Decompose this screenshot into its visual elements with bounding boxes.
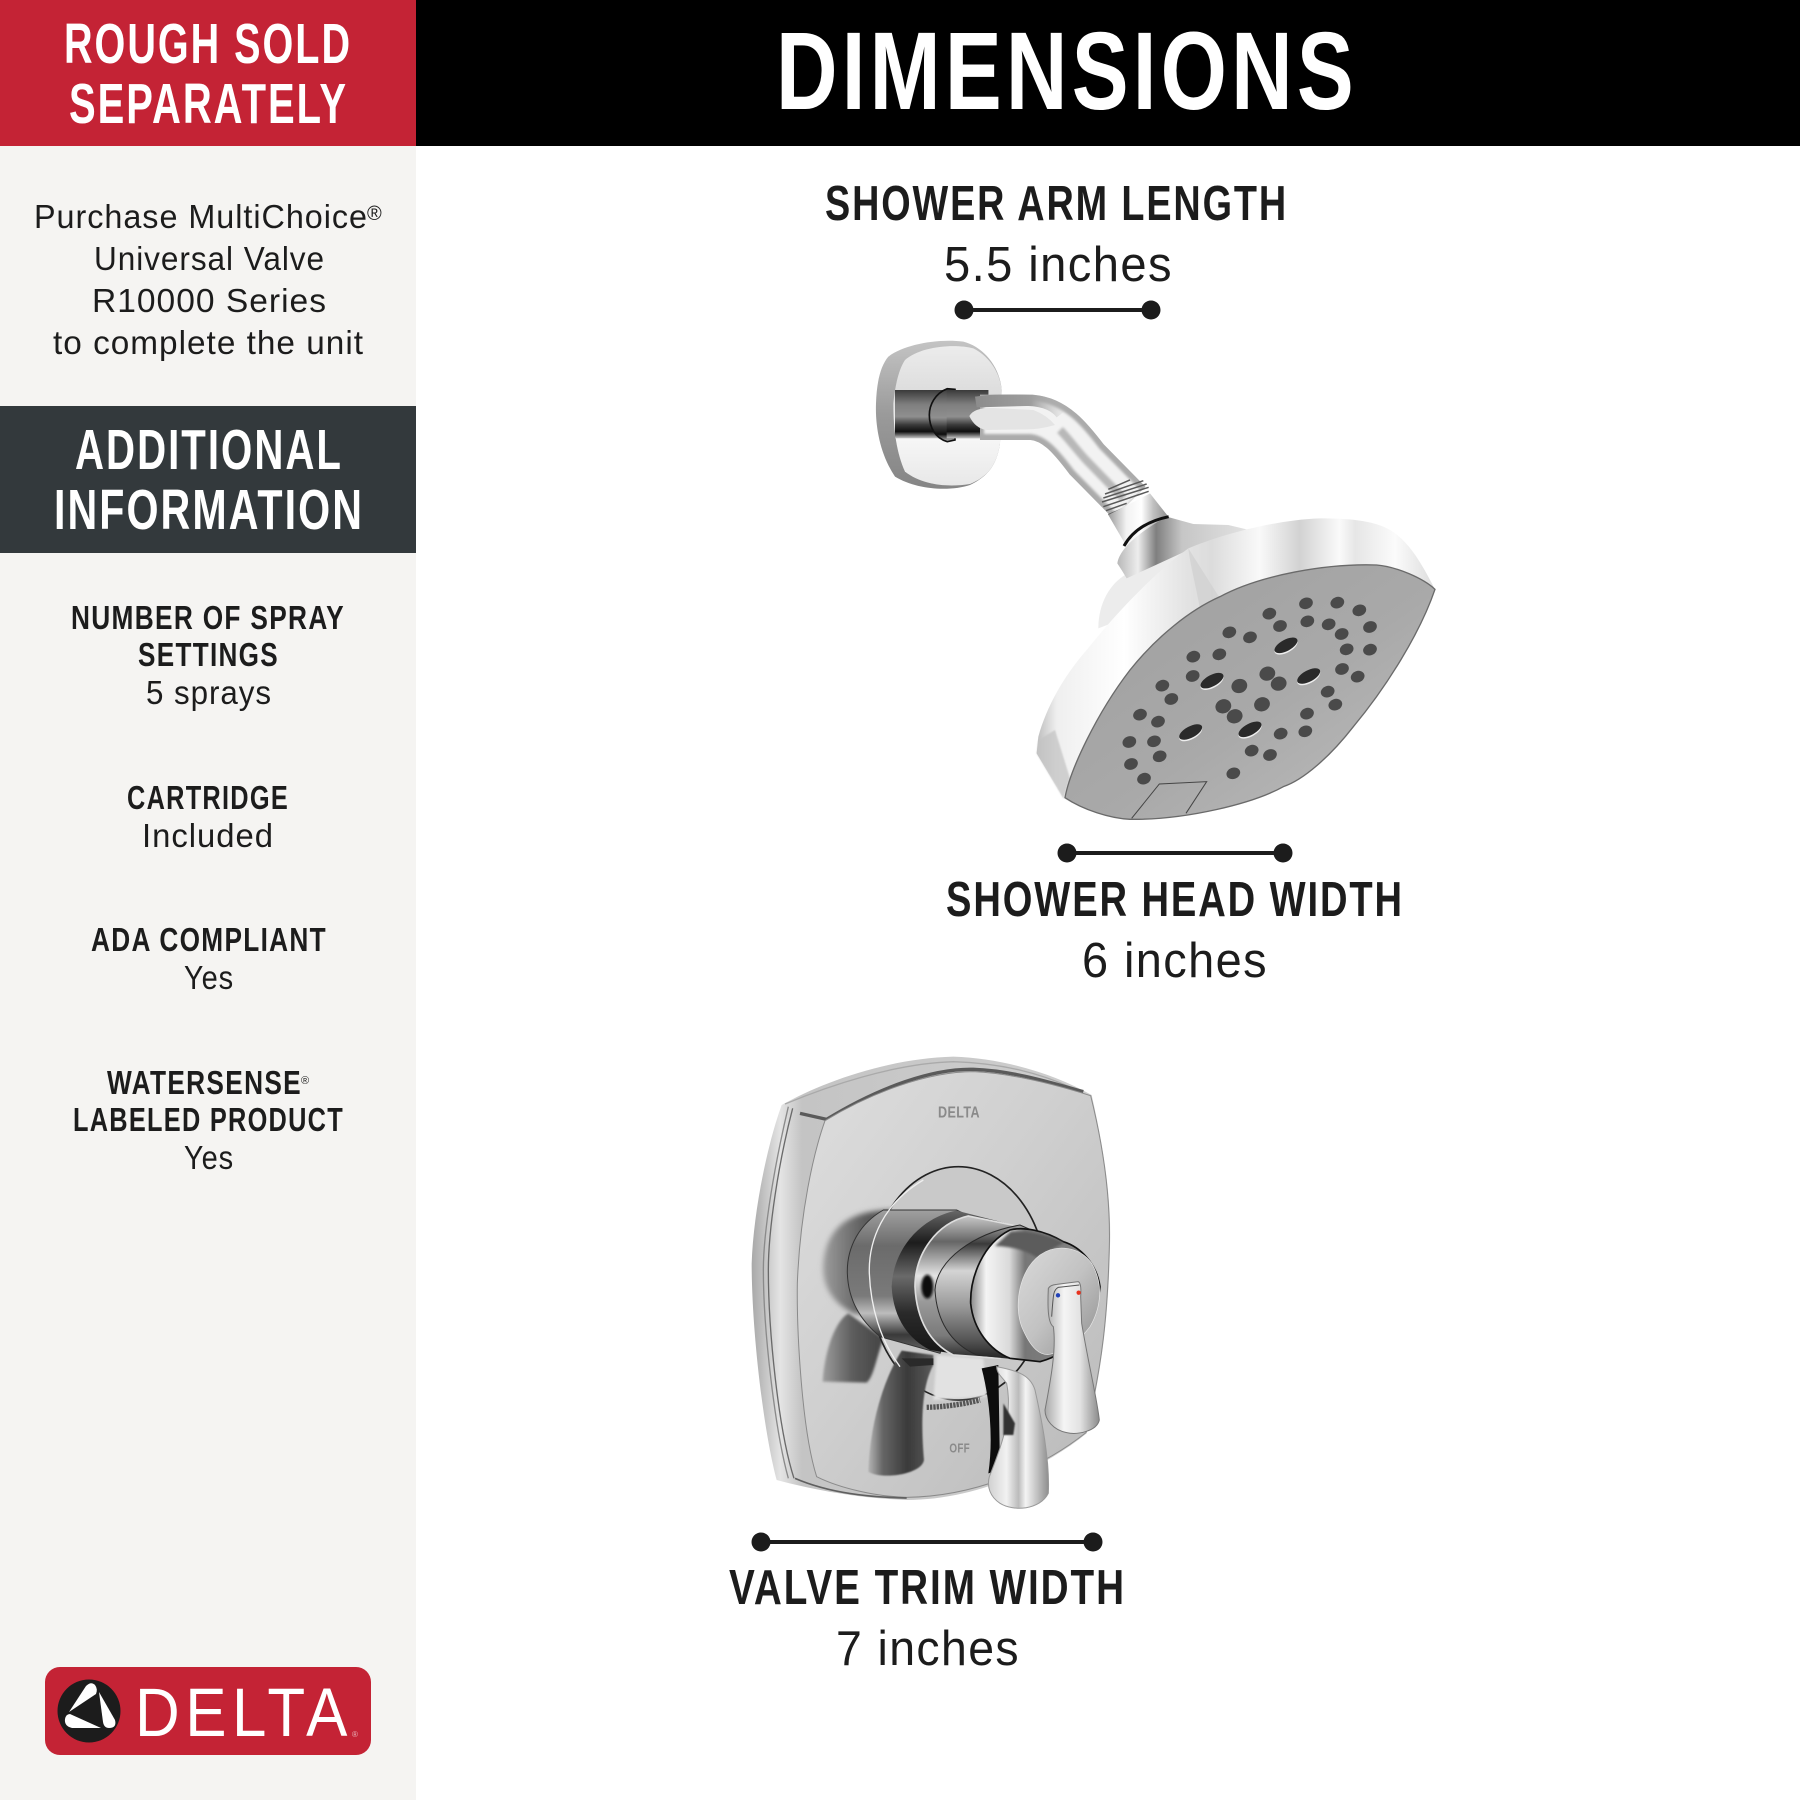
collar bbox=[1117, 517, 1247, 578]
spec: ada compliant: ADA COMPLIANT bbox=[91, 921, 327, 958]
spec: watersense labeled product bbox=[73, 1064, 344, 1176]
diverter scale marking bbox=[927, 1400, 980, 1407]
text block: purchase note bbox=[34, 198, 382, 361]
front ring bbox=[935, 1225, 1047, 1360]
heading: additional information bbox=[54, 418, 364, 542]
spec: ada compliant: Yes bbox=[184, 959, 234, 996]
heading: rough sold separately: ROUGH SOLD bbox=[64, 12, 352, 76]
back cylinder bbox=[847, 1210, 990, 1353]
wall flange bbox=[876, 341, 1002, 489]
panel: sidebar background bbox=[0, 0, 416, 1800]
dimension label: shower head width: 6 inches bbox=[1082, 934, 1268, 988]
spec: cartridge bbox=[127, 779, 289, 854]
shadows on plate bbox=[823, 1210, 907, 1383]
dimension label: valve trim width bbox=[729, 1561, 1126, 1676]
shower arm tube bbox=[969, 394, 1129, 503]
spec: cartridge: Included bbox=[142, 817, 274, 854]
logo: delta: DELTA bbox=[135, 1674, 353, 1751]
spec: number of spray settings: 5 sprays bbox=[146, 674, 272, 711]
tube end bbox=[1108, 493, 1168, 547]
dimension label: shower head width bbox=[946, 873, 1404, 988]
spray nozzles bbox=[1121, 595, 1379, 786]
dimension label: valve trim width: VALVE TRIM WIDTH bbox=[729, 1561, 1126, 1615]
brand mark: DELTA bbox=[938, 1104, 980, 1121]
panel: additional information banner bbox=[0, 406, 416, 553]
dimension line: valve trim bbox=[752, 1532, 1102, 1552]
logo: delta bbox=[45, 1667, 371, 1755]
image: shower arm and flange bbox=[876, 341, 1168, 547]
off label: OFF bbox=[949, 1442, 970, 1456]
escutcheon edge line bbox=[869, 1180, 923, 1367]
plate face bbox=[797, 1072, 1109, 1497]
heading: additional information: INFORMATION bbox=[54, 478, 364, 542]
text block: purchase note: R10000 Series bbox=[92, 282, 327, 319]
spec: number of spray settings: NUMBER OF SPRAY bbox=[71, 599, 345, 636]
rim corner facet bbox=[1188, 548, 1219, 608]
chrome ring bbox=[915, 1216, 1020, 1358]
dimension line: shower arm bbox=[954, 300, 1160, 320]
plate lower bevel line bbox=[795, 1478, 907, 1498]
trim plate edge bbox=[752, 1057, 1110, 1500]
rim lower-left shading bbox=[1037, 730, 1070, 798]
arm sleeve bbox=[895, 389, 988, 442]
reflections on ring bbox=[868, 1351, 987, 1476]
spec: watersense labeled product: WATERSENSE bbox=[107, 1064, 302, 1101]
head rim bbox=[1037, 518, 1435, 820]
spec: number of spray settings bbox=[71, 599, 345, 711]
diverter lever bbox=[988, 1367, 1049, 1508]
heading: rough sold separately: SEPARATELY bbox=[69, 72, 348, 136]
head face bbox=[1065, 565, 1435, 819]
thread bbox=[1102, 480, 1149, 515]
dimension label: shower head width: SHOWER HEAD WIDTH bbox=[946, 873, 1404, 927]
spec: number of spray settings: SETTINGS bbox=[138, 636, 279, 673]
heading: rough sold separately bbox=[64, 12, 352, 136]
text block: purchase note: to complete the unit bbox=[53, 324, 364, 361]
escutcheon ring bbox=[870, 1167, 1047, 1400]
valve body bbox=[847, 1180, 1100, 1367]
temperature lever bbox=[1045, 1282, 1099, 1433]
text block: purchase note: ® bbox=[367, 203, 382, 225]
plate bevel lines bbox=[763, 1062, 1083, 1478]
back dome bbox=[1098, 543, 1193, 628]
spec: watersense labeled product: Yes bbox=[184, 1139, 234, 1176]
black gap under handle bbox=[982, 1365, 1000, 1473]
image: shower head bbox=[1037, 517, 1435, 820]
spec: cartridge: CARTRIDGE bbox=[127, 779, 289, 816]
icon: delta triangle mark bbox=[58, 1680, 120, 1742]
heading: dimensions: DIMENSIONS bbox=[776, 10, 1358, 133]
dimension line: shower head bbox=[1058, 844, 1292, 862]
dimension label: shower arm length bbox=[825, 177, 1288, 292]
panel: rough sold separately banner bbox=[0, 0, 416, 146]
heading: additional information: ADDITIONAL bbox=[75, 418, 343, 482]
logo: delta: ® bbox=[352, 1730, 358, 1739]
panel: dimensions banner bbox=[416, 0, 1800, 146]
spray selector tab bbox=[1132, 782, 1207, 818]
image: valve trim bbox=[752, 1057, 1110, 1508]
spec: watersense labeled product: ® bbox=[301, 1075, 309, 1087]
handle end cap bbox=[1018, 1248, 1100, 1354]
dimension label: valve trim width: 7 inches bbox=[836, 1622, 1020, 1676]
spec: ada compliant bbox=[91, 921, 327, 996]
large jets bbox=[1177, 634, 1323, 745]
text block: purchase note: Universal Valve bbox=[94, 240, 325, 277]
spec: watersense labeled product: LABELED PRODUCT bbox=[73, 1101, 344, 1138]
text block: purchase note: Purchase MultiChoice bbox=[34, 198, 368, 235]
dimension label: shower arm length: SHOWER ARM LENGTH bbox=[825, 177, 1288, 231]
dimension label: shower arm length: 5.5 inches bbox=[944, 238, 1173, 292]
handle body bbox=[971, 1229, 1100, 1362]
dark ring bbox=[892, 1211, 1007, 1357]
